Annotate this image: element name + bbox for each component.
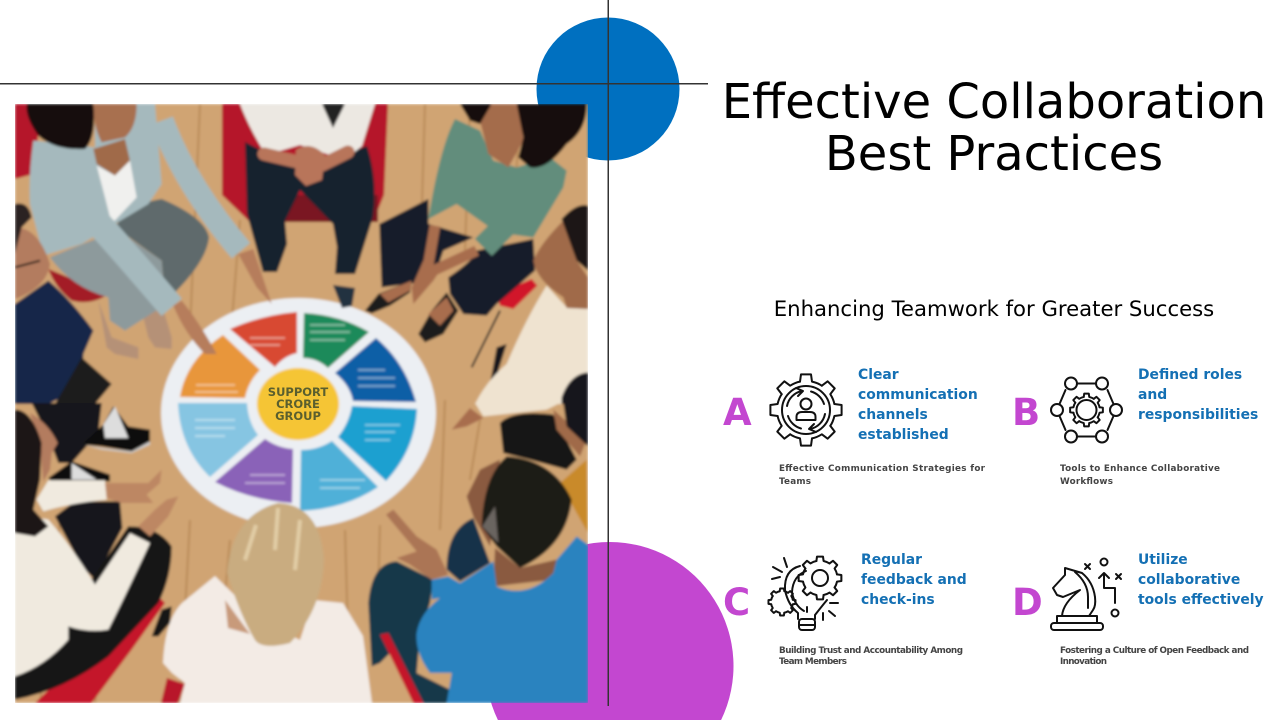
caption A: Effective Communication Strategies for [779,464,986,474]
icon: light bulb with gears [768,556,842,630]
item C [723,552,967,667]
caption C: Building Trust and Accountability Among [779,646,963,656]
people: top-left quadrant [15,104,272,404]
heading A: communication [858,387,978,403]
circle: blue accent [536,18,680,160]
heading C: feedback and [861,572,967,588]
caption C: Team Members [779,657,847,667]
people: bottom-left quadrant [15,403,178,703]
icon: gear with person [770,374,842,446]
caption D [1060,646,1249,667]
wheel label [268,388,328,420]
vertical rule [608,0,609,706]
caption B: Workflows [1060,477,1113,487]
people: top-right quadrant [365,104,588,404]
letter D: D [1012,581,1043,624]
heading A: established [858,427,949,443]
icon: chess knight strategy [1051,558,1121,630]
caption D: Fostering a Culture of Open Feedback and [1060,646,1249,656]
heading A: channels [858,407,928,423]
title: Effective Collaboration [722,74,1266,130]
heading B: and [1138,387,1167,403]
caption D: Innovation [1060,657,1107,667]
wheel label: SUPPORT [268,385,328,399]
horizontal rule [0,83,708,84]
heading B: Defined roles [1138,367,1242,383]
heading B: responsibilities [1138,407,1258,423]
wheel poster [161,298,436,528]
heading A: Clear [858,367,899,383]
heading C: Regular [861,552,922,568]
person: bottom centre blonde [161,503,372,703]
heading D: tools effectively [1138,592,1264,608]
subtitle: Enhancing Teamwork for Greater Success [774,296,1214,321]
letter C: C [723,581,750,624]
letter A: A [723,391,752,434]
caption A [779,464,986,487]
heading D: Utilize [1138,552,1188,568]
item D [1012,552,1264,667]
wheel label: CRORE [276,397,320,411]
heading C: check-ins [861,592,935,608]
heading D: collaborative [1138,572,1240,588]
caption B [1060,464,1220,487]
icon: hexagon network with gear [1051,378,1122,442]
caption A: Teams [779,477,811,487]
caption B: Tools to Enhance Collaborative [1060,464,1220,474]
letter B: B [1012,391,1040,434]
people: bottom-right quadrant [368,403,588,703]
photo: team seated around a support group wheel [15,104,588,703]
caption C [779,646,963,667]
title: Best Practices [825,126,1163,182]
person: top centre in white and black [222,104,388,308]
circle: purple accent [486,542,734,720]
wheel label: GROUP [275,409,321,423]
item A [723,367,986,487]
item B [1012,367,1258,487]
